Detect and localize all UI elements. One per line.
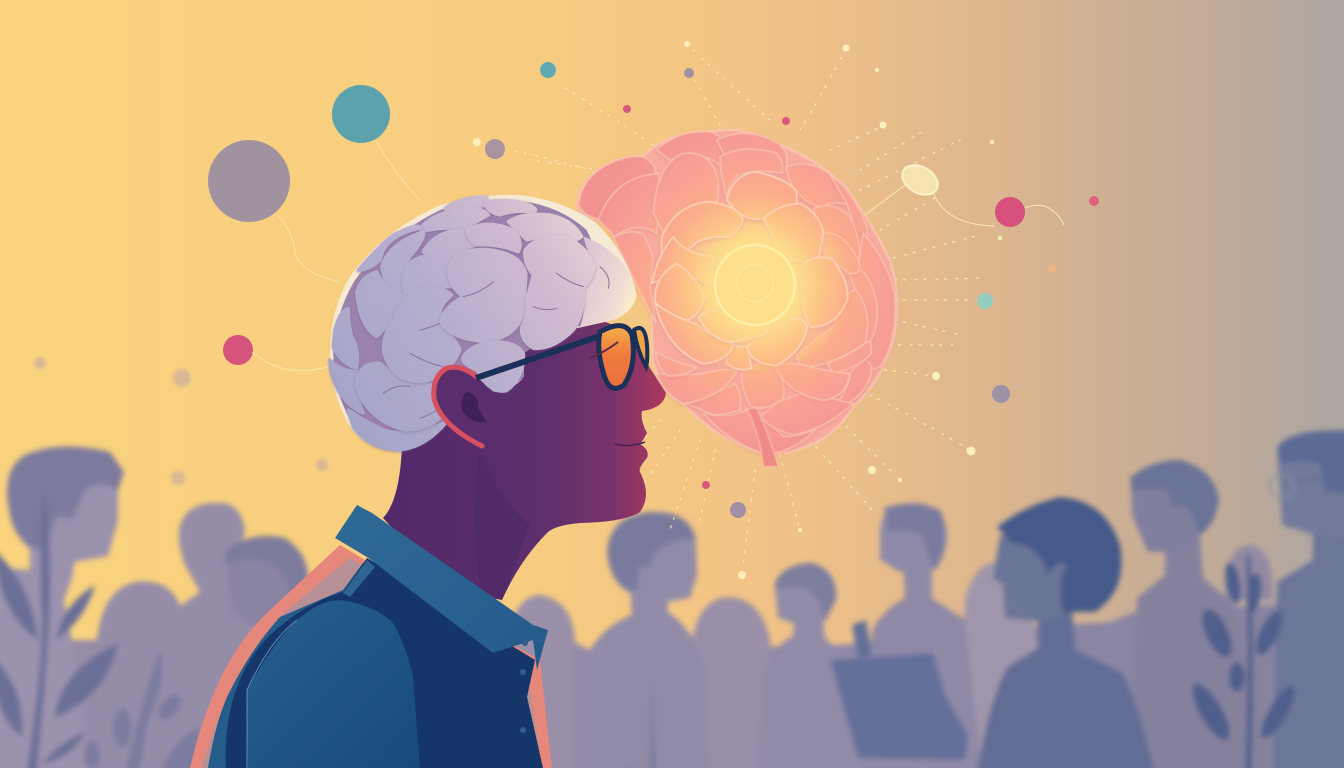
silhouette: right man with glasses xyxy=(1270,430,1344,768)
brain: central glow xyxy=(692,222,818,348)
ear xyxy=(434,367,492,446)
mouth xyxy=(615,442,645,446)
oval seed xyxy=(897,159,943,201)
glasses xyxy=(476,326,647,388)
pink node xyxy=(995,197,1025,227)
shirt back rose xyxy=(202,558,542,768)
shirt strap detail xyxy=(343,560,375,597)
silhouette: left man xyxy=(0,447,124,768)
plant: left foreground xyxy=(0,488,118,768)
brain outline glow xyxy=(330,195,637,450)
silhouette: clipboard holder xyxy=(830,620,968,760)
plant: small centre sprigs xyxy=(618,680,658,768)
brain: inner glowing ground xyxy=(652,197,852,370)
brain gap fill xyxy=(333,201,613,447)
silhouette: small centre man xyxy=(755,563,868,768)
neck shadow xyxy=(475,450,530,600)
bubble connectors xyxy=(252,140,420,371)
plant: right foreground xyxy=(1185,555,1301,768)
brain: outer lobes xyxy=(578,132,896,455)
sleeve highlight xyxy=(247,620,297,768)
man with brain xyxy=(190,195,666,768)
silhouette: glasses man back xyxy=(1128,460,1275,768)
shirt back blue panel xyxy=(208,563,420,768)
neck and head xyxy=(383,320,666,600)
eye xyxy=(590,342,618,358)
background crowd silhouettes xyxy=(0,430,1344,768)
brain: core inner ring xyxy=(737,265,773,302)
crowd base mass xyxy=(0,600,1344,768)
faint background dots xyxy=(34,357,328,485)
plant: small left foreground xyxy=(84,650,205,768)
brain: base silhouette xyxy=(577,130,897,453)
silhouette: woman with bob hair xyxy=(973,497,1160,768)
shirt torso xyxy=(226,558,543,768)
silhouette: upper right man xyxy=(865,503,985,768)
bubble: grey purple xyxy=(208,140,290,222)
bubble: small grey xyxy=(485,139,505,159)
brain: glowing core xyxy=(715,245,795,325)
brain fold lines xyxy=(383,267,609,418)
radiating particles around brain xyxy=(510,45,985,575)
shirt collar xyxy=(335,505,548,670)
bubble: teal xyxy=(332,85,390,143)
human brain cap xyxy=(330,195,637,450)
accent dots xyxy=(540,62,1099,518)
silhouette: back row centre xyxy=(505,545,1272,768)
brain lobes xyxy=(330,197,594,450)
shirt back peach edge xyxy=(190,545,552,768)
brain far right lobe xyxy=(580,237,636,327)
connector lines xyxy=(865,185,1064,226)
bubble: pink xyxy=(223,335,253,365)
particle dots xyxy=(473,41,1056,579)
silhouette: left group xyxy=(95,503,345,768)
brain: inner lobes xyxy=(652,172,848,370)
buttons xyxy=(520,640,528,733)
silhouette: centre man xyxy=(585,512,712,768)
brain: stem xyxy=(747,408,778,467)
glowing pink brain xyxy=(577,130,897,467)
shirt sleeve xyxy=(247,600,420,768)
seed and node on the right xyxy=(865,159,1064,227)
connecting lines and bubbles xyxy=(208,85,505,371)
